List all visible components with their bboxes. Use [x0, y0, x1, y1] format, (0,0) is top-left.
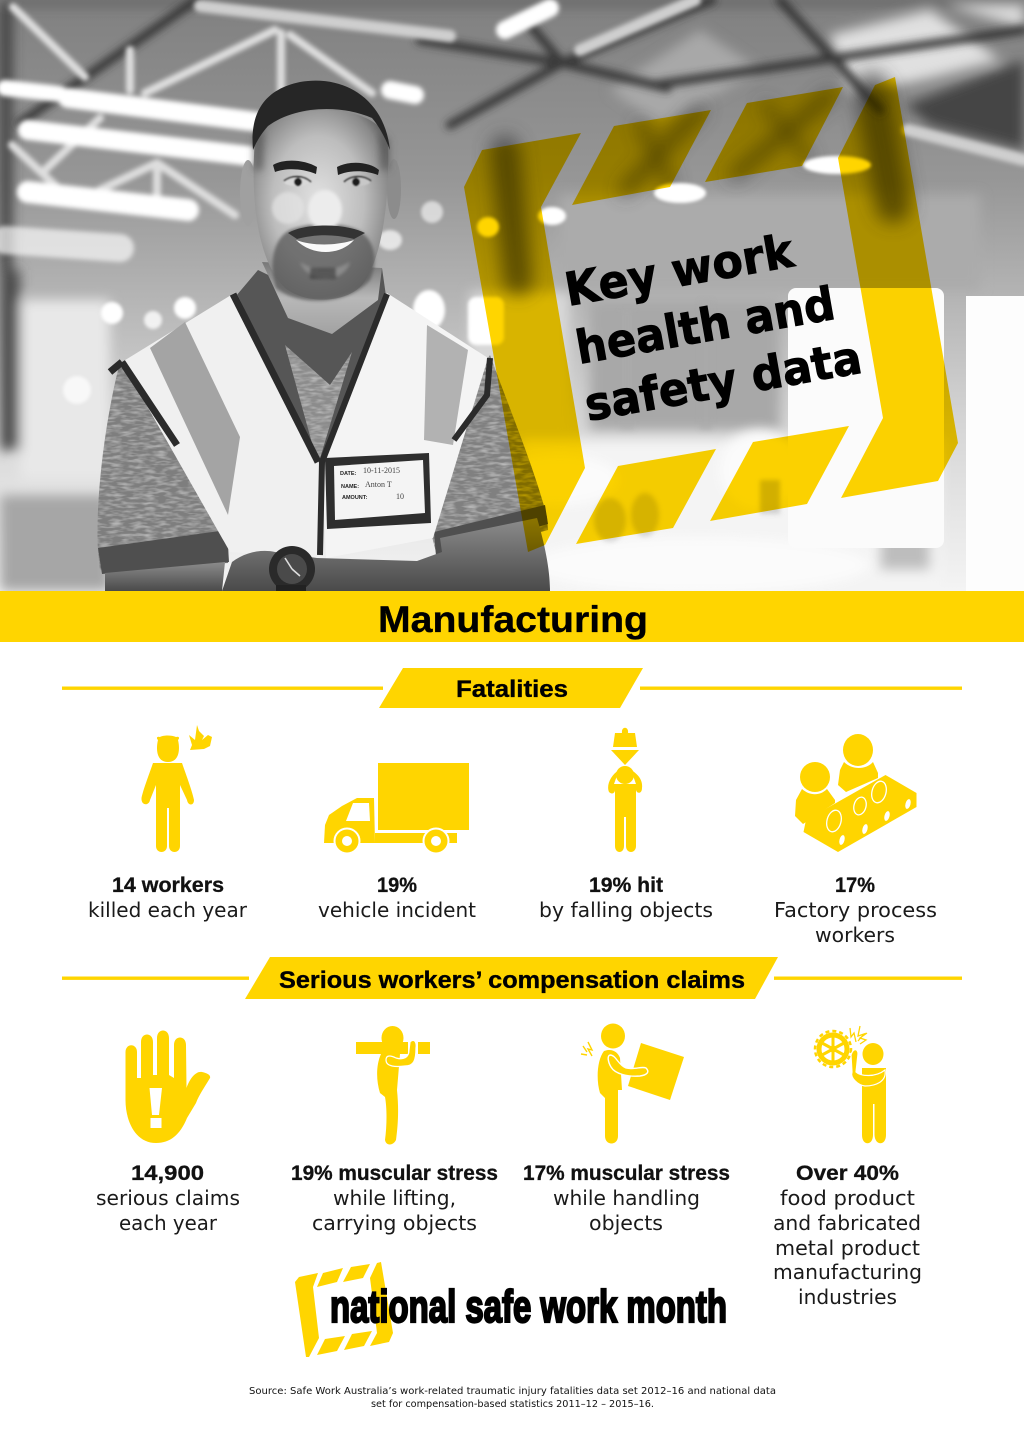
stat: over 40% food and metal manufacturing: metal product: [775, 1236, 920, 1260]
icon: warning hand: [126, 1030, 210, 1143]
name badge: AMOUNT:: [342, 495, 368, 501]
stat: 17% muscular stress handling: [523, 1162, 730, 1235]
name badge: Anton T: [365, 480, 392, 489]
bottom left stripe: [576, 449, 716, 544]
icon: factory workers at conveyor: [795, 734, 916, 852]
manufacturing banner: [0, 591, 1024, 642]
stat: 19% hit by falling objects: by falling objects: [539, 898, 713, 922]
top left stripe: [572, 110, 711, 205]
stat: 14,900 serious claims each year: [96, 1162, 240, 1235]
name badge: 10: [396, 492, 404, 501]
left bracket: [464, 133, 585, 552]
stat: 19% hit by falling objects: [539, 874, 713, 922]
name badge: NAME:: [341, 484, 359, 490]
stat: 17% muscular stress handling: objects: [589, 1211, 663, 1235]
stat: over 40% food and metal manufacturing: [773, 1162, 922, 1309]
title: safety data: [581, 330, 866, 432]
bottom right stripe: [710, 426, 849, 521]
stat: 17% muscular stress handling: 17% muscular stress: [523, 1162, 730, 1185]
title: [561, 223, 866, 432]
section heading: serious workers' compensation claims: Serious workers’ compensation claims: [279, 967, 745, 994]
stat: over 40% food and metal manufacturing: industries: [798, 1285, 897, 1309]
name badge: [325, 453, 431, 529]
icon: person injured by machinery gear: [815, 1026, 886, 1143]
photo: smiling worker in reflective vest: [97, 81, 550, 593]
name badge: 10-11-2015: [363, 466, 400, 475]
stat: over 40% food and metal manufacturing: Over 40%: [796, 1162, 899, 1185]
title: health and: [572, 276, 839, 375]
stat: 19% vehicle incident: 19%: [377, 874, 417, 897]
stat: 17% factory process workers: Factory process: [774, 898, 937, 922]
icon: delivery truck: [324, 763, 469, 854]
logo: national safe work month: national safe work month: [330, 1281, 727, 1332]
section heading: fatalities: Fatalities: [456, 676, 568, 703]
stat: 14 workers killed each year: [88, 874, 248, 922]
stat: over 40% food and metal manufacturing: food product: [780, 1186, 915, 1210]
stat: over 40% food and metal manufacturing: manufacturing: [773, 1260, 922, 1284]
source note: Source: Safe Work Australia’s work-related traumatic injury fatalities data set 2012–16 and national data: [249, 1386, 776, 1397]
manufacturing banner: Manufacturing: [378, 599, 648, 640]
stat: 14 workers killed each year: killed each year: [88, 898, 248, 922]
top right stripe: [705, 87, 843, 182]
stat: over 40% food and metal manufacturing: and fabricated: [773, 1211, 921, 1235]
logo: national safe work month: [295, 1262, 727, 1357]
stat: 14,900 serious claims each year: 14,900: [131, 1162, 204, 1185]
photo background: blurred factory roof and floor: [0, 0, 1024, 593]
yellow chevron frame overlay: [464, 77, 958, 552]
stat: 19% muscular stress lifting: [291, 1162, 498, 1235]
stat: 14 workers killed each year: 14 workers: [112, 874, 224, 897]
name badge: DATE:: [340, 471, 357, 477]
title: Key work: [561, 223, 799, 317]
icon: worker with dove: [141, 725, 212, 852]
source note: set for compensation-based statistics 2011–12 – 2015–16.: [371, 1399, 654, 1410]
stat: 19% vehicle incident: vehicle incident: [318, 898, 476, 922]
icon: person straining handling box: [581, 1024, 684, 1144]
hero photo: factory interior with worker: [0, 0, 1024, 593]
stat: 17% factory process workers: 17%: [835, 874, 875, 897]
section heading: serious workers' compensation claims: [62, 957, 962, 999]
stat: 14,900 serious claims each year: serious claims: [96, 1186, 240, 1210]
right bracket: [838, 77, 958, 498]
stat: 17% factory process workers: workers: [815, 923, 895, 947]
sleeves: [97, 355, 548, 570]
stat: 19% muscular stress lifting: 19% muscular stress: [291, 1162, 498, 1185]
stat: 19% vehicle incident: [318, 874, 476, 922]
stat: 19% hit by falling objects: 19% hit: [589, 874, 663, 897]
section heading: fatalities: [62, 668, 962, 708]
stat: 19% muscular stress lifting: while lifting,: [333, 1186, 456, 1210]
head: [240, 81, 401, 301]
watch: [269, 546, 315, 593]
icon: person carrying beam on shoulder: [356, 1026, 430, 1144]
forearms: [105, 518, 550, 591]
stat: 17% muscular stress handling: while handling: [553, 1186, 700, 1210]
stat: 19% muscular stress lifting: carrying objects: [312, 1211, 477, 1235]
stat: 14,900 serious claims each year: each year: [119, 1211, 218, 1235]
icon: person hit by falling weight: [608, 728, 642, 852]
source note: [249, 1386, 776, 1410]
stat: 17% factory process workers: [774, 874, 937, 947]
vest: [110, 292, 490, 558]
neck and shirt collar: [236, 262, 386, 465]
